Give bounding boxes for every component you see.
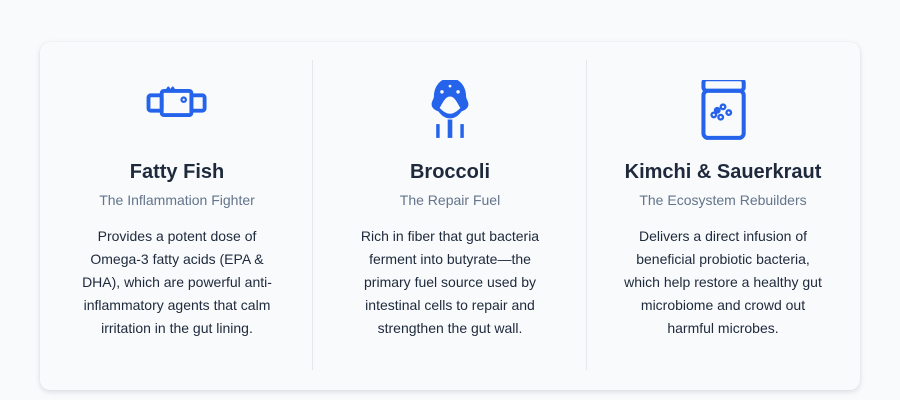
card: Broccoli <box>410 161 490 183</box>
card: Delivers a direct infusion of beneficial probiotic bacteria, which help restore a healthy gut microbiome and crowd out harmful microbes. <box>624 228 822 336</box>
icon: jar <box>701 80 746 140</box>
panel: kimchi <box>624 80 822 336</box>
panel: broccoli <box>361 80 540 336</box>
card: Provides a potent dose of Omega-3 fatty acids (EPA & DHA), which are powerful anti-inflammatory agents that calm irritation in the gut lining. <box>82 228 272 336</box>
card: The Repair Fuel <box>400 192 500 208</box>
card: The Ecosystem Rebuilders <box>639 192 807 208</box>
icon: broccoli <box>432 80 468 138</box>
card: Fatty Fish <box>130 161 224 183</box>
card <box>40 42 860 390</box>
card: The Inflammation Fighter <box>99 192 255 208</box>
panel: fatty fish <box>82 86 272 336</box>
card: Kimchi & Sauerkraut <box>625 161 821 183</box>
card: Rich in fiber that gut bacteria ferment into butyrate—the primary fuel source used by intestinal cells to repair and strengthen the gut wall. <box>361 228 539 336</box>
icon: fish <box>146 86 207 117</box>
